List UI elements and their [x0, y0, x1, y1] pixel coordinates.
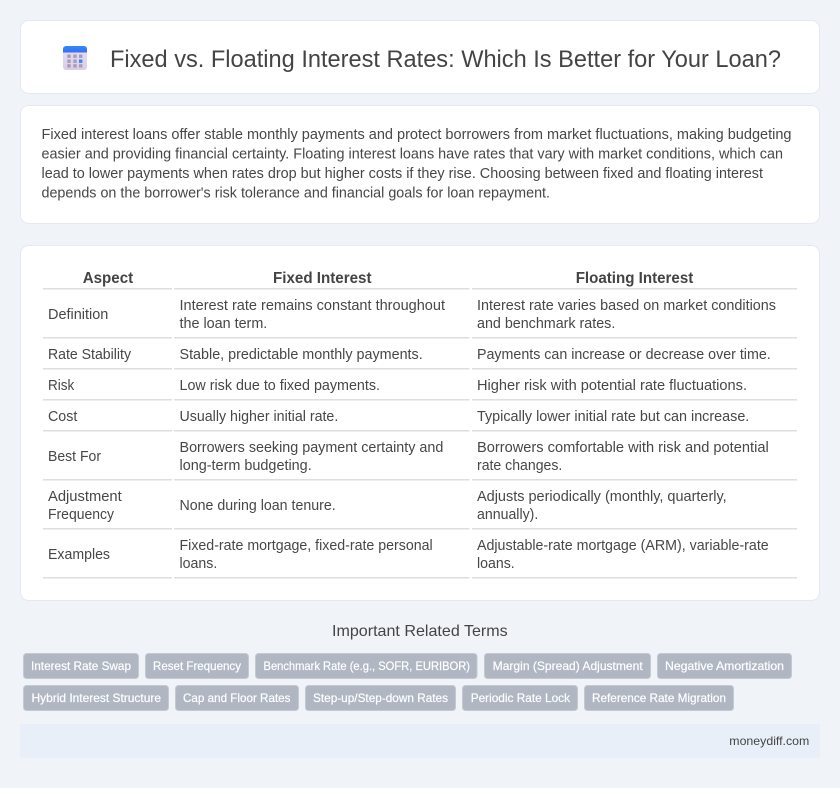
tag: margin adjustment [484, 654, 650, 678]
description text [42, 127, 791, 202]
panel: comparison table [20, 246, 820, 600]
tag: negative amortization: Negative Amortization [665, 659, 784, 673]
tag: benchmark rate [256, 654, 477, 678]
panel: description [20, 106, 820, 224]
header card [20, 20, 820, 94]
row: risk: Low risk due to fixed payments. [180, 378, 380, 394]
row: examples: loans. [180, 556, 217, 572]
row: adjustment frequency: annually). [477, 507, 538, 523]
row: best for [48, 440, 769, 474]
row: cost: Typically lower initial rate but can increase. [477, 409, 749, 425]
tag: cap and floor rates [176, 686, 298, 710]
description text: lead to lower payments when rates drop but higher costs if they rise. Choosing between fixed and floating interest [42, 166, 763, 182]
related terms tags [24, 654, 792, 710]
tag: hybrid interest structure: Hybrid Interest Structure [32, 691, 161, 705]
footer [20, 724, 820, 758]
table header row [83, 270, 694, 287]
row: definition: and benchmark rates. [477, 316, 615, 332]
row: cost: Usually higher initial rate. [180, 409, 338, 425]
row: risk [48, 378, 747, 394]
row: rate stability [48, 347, 771, 363]
heading: important related terms: Important Related Terms [332, 623, 508, 640]
tag: step-up/step-down rates: Step-up/Step-down Rates [313, 691, 448, 705]
icon: calendar [63, 46, 87, 70]
tag: interest rate swap [24, 654, 138, 678]
row: adjustment frequency: Adjustment [48, 489, 122, 505]
tag: benchmark rate: Benchmark Rate (e.g., SOFR, EURIBOR) [264, 659, 470, 673]
row: best for: Best For [48, 449, 101, 465]
row: adjustment frequency: Adjusts periodically (monthly, quarterly, [477, 489, 727, 505]
row: examples: Fixed-rate mortgage, fixed-rate personal [180, 538, 433, 554]
tag: periodic rate lock: Periodic Rate Lock [471, 691, 571, 705]
row: best for: long-term budgeting. [180, 458, 312, 474]
row: risk: Higher risk with potential rate fluctuations. [477, 378, 747, 394]
row: adjustment frequency: Frequency [48, 507, 115, 523]
row: best for: Borrowers seeking payment certainty and [180, 440, 443, 456]
row: definition: Interest rate remains constant throughout [180, 298, 445, 314]
tag: cap and floor rates: Cap and Floor Rates [183, 691, 290, 705]
row: best for: rate changes. [477, 458, 562, 474]
row: examples: Examples [48, 547, 110, 563]
tag: reference rate migration: Reference Rate Migration [592, 691, 726, 705]
row: rate stability: Stable, predictable monthly payments. [180, 347, 423, 363]
row: rate stability: Rate Stability [48, 347, 132, 363]
tag: interest rate swap: Interest Rate Swap [31, 659, 131, 673]
tag: step-up/step-down rates [306, 686, 456, 710]
tag: margin adjustment: Margin (Spread) Adjustment [493, 659, 643, 673]
description text: Fixed interest loans offer stable monthly payments and protect borrowers from market fluctuations, making budgeting [42, 127, 791, 143]
row: examples [48, 538, 769, 572]
row: risk: Risk [48, 378, 75, 394]
table header row: Floating Interest [576, 270, 694, 287]
table header row: Aspect [83, 270, 134, 287]
table header row: Fixed Interest [273, 270, 372, 287]
tag: reference rate migration [584, 686, 734, 710]
tag: negative amortization [658, 654, 792, 678]
row: cost [48, 409, 749, 425]
row: adjustment frequency: None during loan tenure. [180, 498, 336, 514]
tag: hybrid interest structure [24, 686, 168, 710]
row: adjustment frequency [48, 489, 727, 523]
title: Fixed vs. Floating Interest Rates: Which Is Better for Your Loan? [110, 46, 781, 73]
row: definition [48, 298, 776, 332]
row: cost: Cost [48, 409, 77, 425]
row: examples: loans. [477, 556, 515, 572]
row: definition: Interest rate varies based on market conditions [477, 298, 776, 314]
row: definition: Definition [48, 307, 108, 323]
description text: depends on the borrower's risk tolerance and financial goals for loan repayment. [42, 186, 550, 202]
tag: reset frequency [146, 654, 248, 678]
row: definition: the loan term. [180, 316, 267, 332]
tag: periodic rate lock [462, 686, 578, 710]
description text: easier and providing financial certainty. Floating interest loans have rates that vary with market conditions, which can [42, 146, 783, 162]
footer source: moneydiff.com [729, 734, 809, 748]
tag: reset frequency: Reset Frequency [153, 659, 241, 673]
row: examples: Adjustable-rate mortgage (ARM), variable-rate [477, 538, 769, 554]
row: rate stability: Payments can increase or decrease over time. [477, 347, 771, 363]
row: best for: Borrowers comfortable with risk and potential [477, 440, 769, 456]
